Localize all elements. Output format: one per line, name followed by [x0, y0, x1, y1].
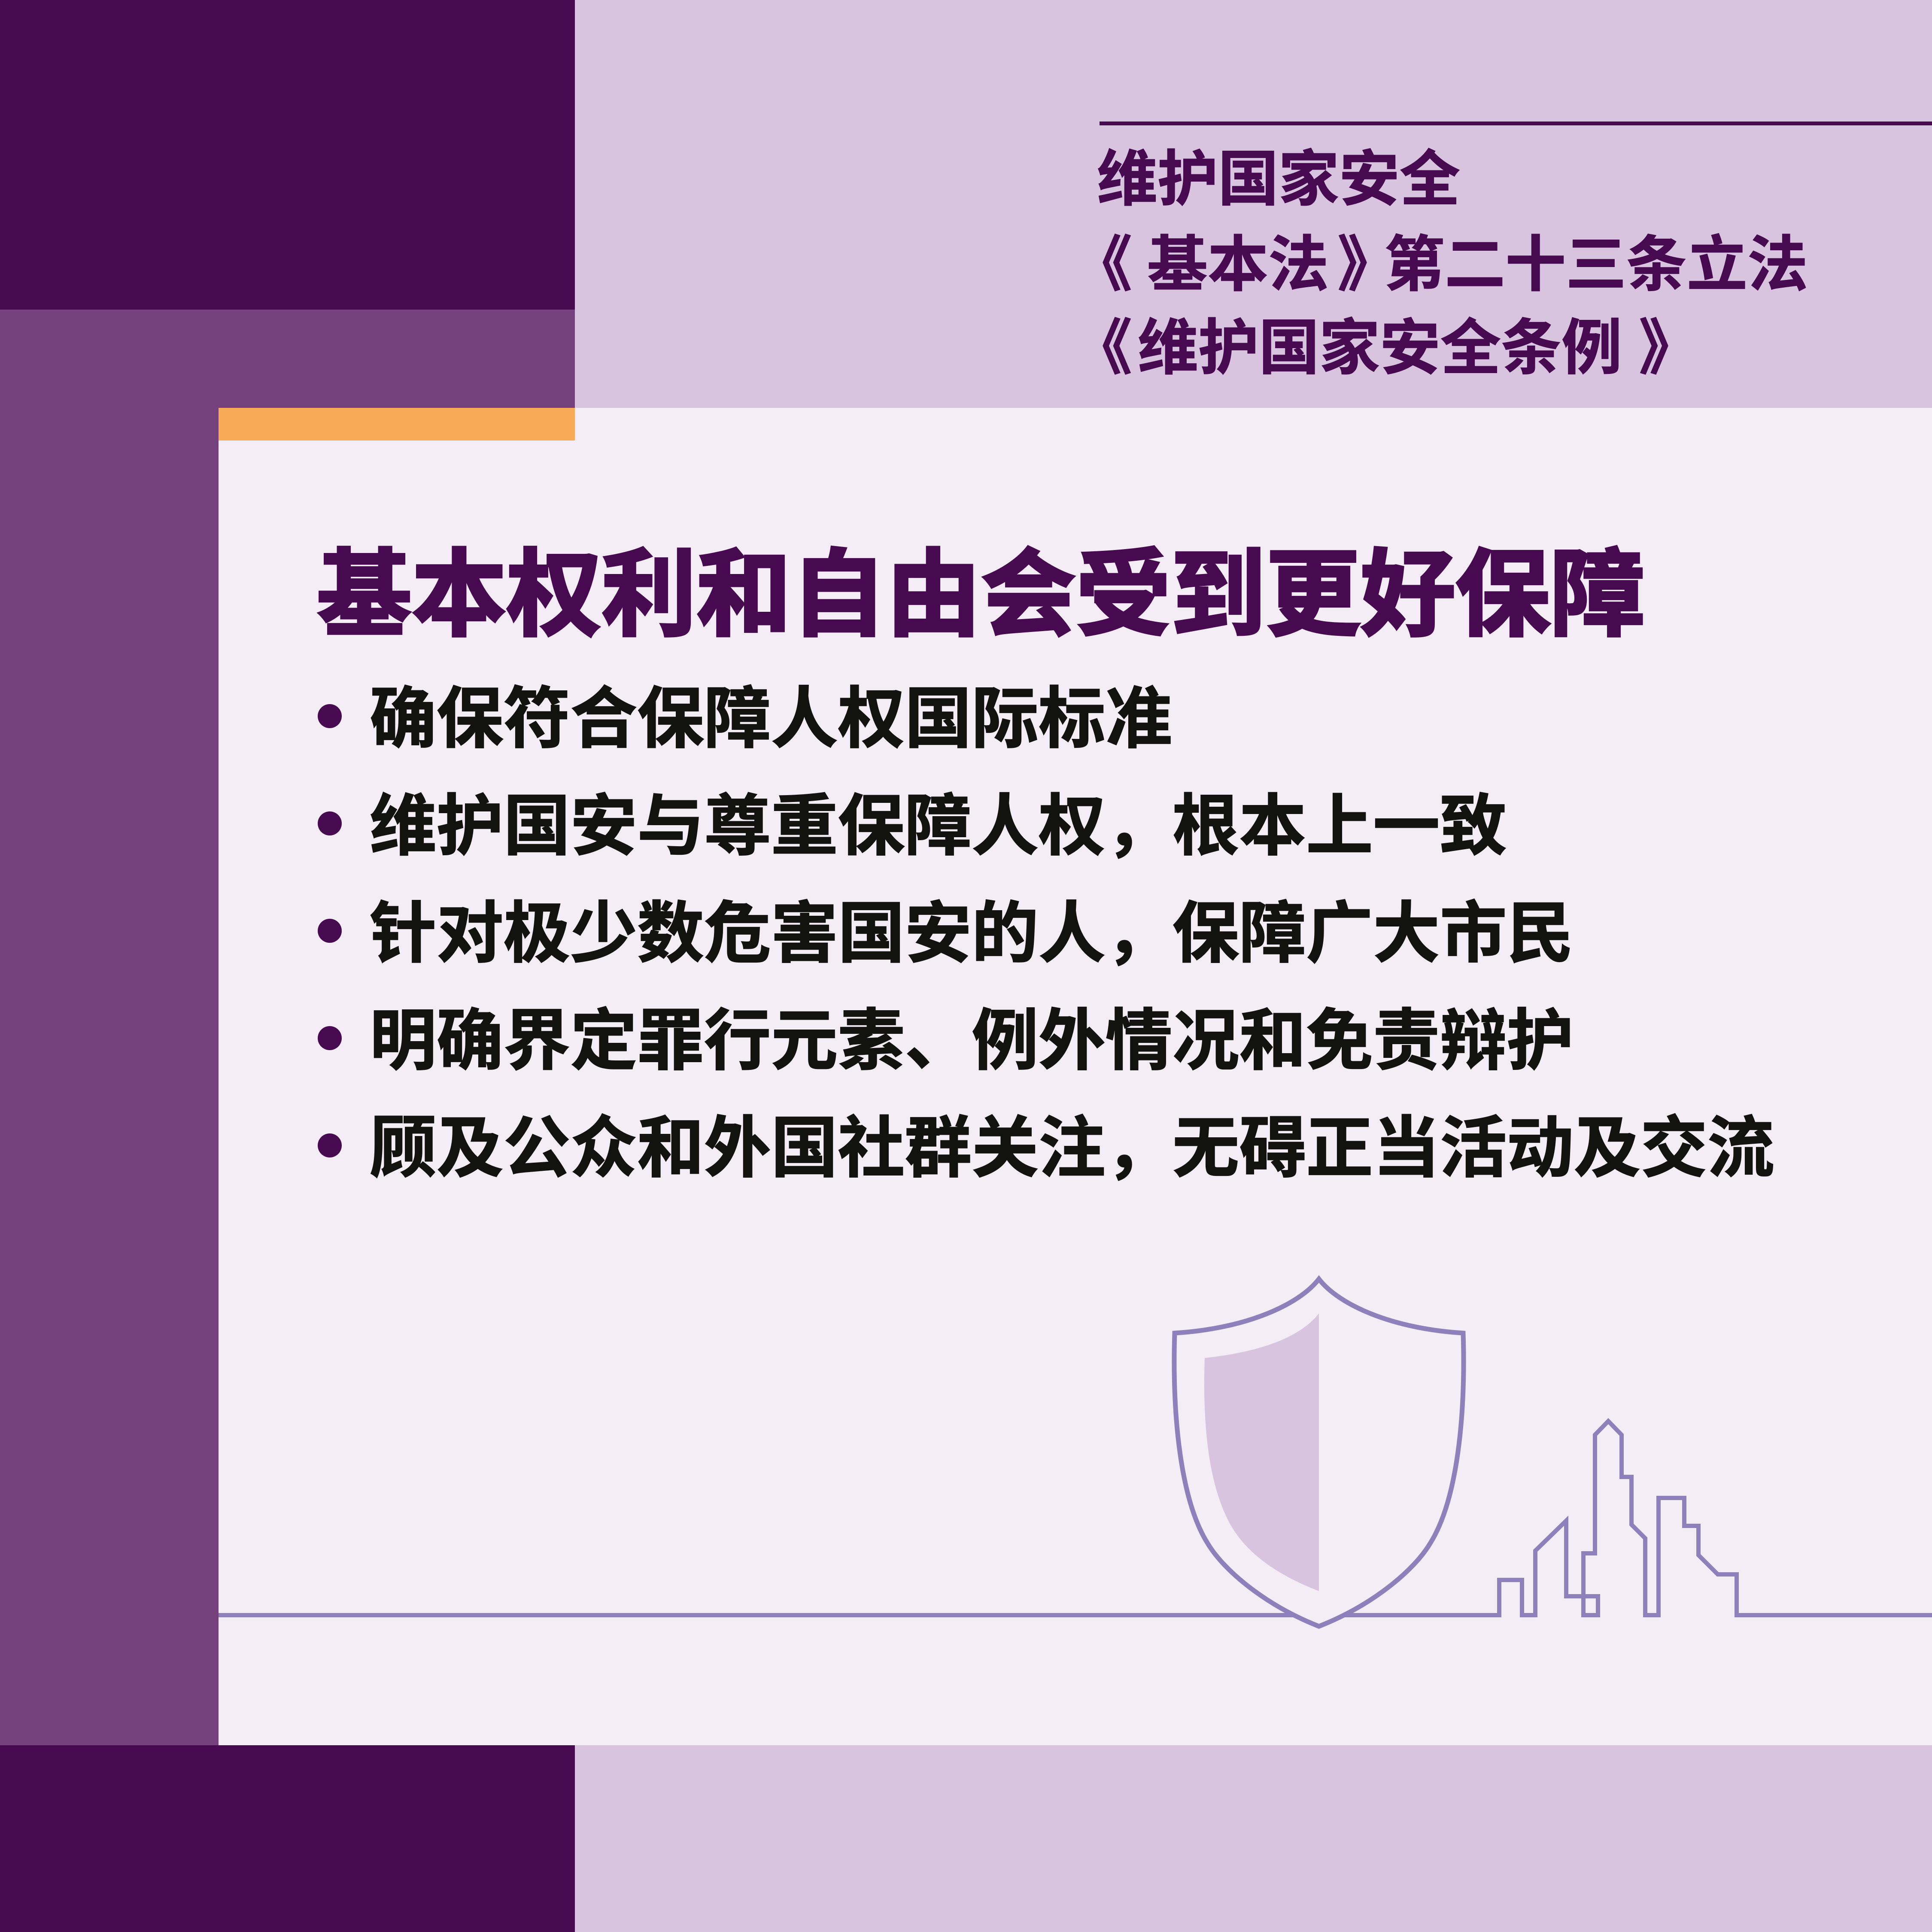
ground line and skyline — [219, 1421, 1932, 1615]
panel: bottom-left dark block — [0, 1745, 575, 1932]
header text block — [1073, 151, 1812, 383]
header line 3: 《维护国家安全条例 》 — [1072, 314, 1699, 382]
main title: 基本权利和自由会受到更好保障 — [317, 542, 1645, 648]
bullet 5: 顾及公众和外国社群关注，无碍正当活动及交流 — [370, 1111, 1774, 1186]
header rule — [1100, 122, 1932, 125]
bullet 1 — [313, 686, 1782, 755]
bullet 2: 维护国安与尊重保障人权，根本上一致 — [370, 789, 1507, 864]
panel: main pale content — [219, 408, 1932, 1745]
panel: top-left dark block — [0, 0, 575, 310]
header line 1: 维护国家安全 — [1097, 145, 1460, 213]
orange accent bar — [219, 408, 575, 440]
panel: top-right light band — [575, 0, 1932, 408]
panel: bottom-right light band — [575, 1745, 1932, 1932]
bullet 1: 确保符合保障人权国际标准 — [370, 682, 1173, 756]
bullet list — [313, 686, 1782, 1197]
bullet 3: 针对极少数危害国安的人，保障广大市民 — [370, 896, 1574, 971]
panel: mid purple frame — [0, 310, 575, 408]
header line 2: 《基本法》第二十三条立法 — [1072, 231, 1808, 298]
bullet 4: 明确界定罪行元素、例外情况和免责辩护 — [370, 1004, 1574, 1078]
icon: shield — [1174, 1279, 1464, 1626]
panel: left purple column — [0, 408, 219, 1745]
